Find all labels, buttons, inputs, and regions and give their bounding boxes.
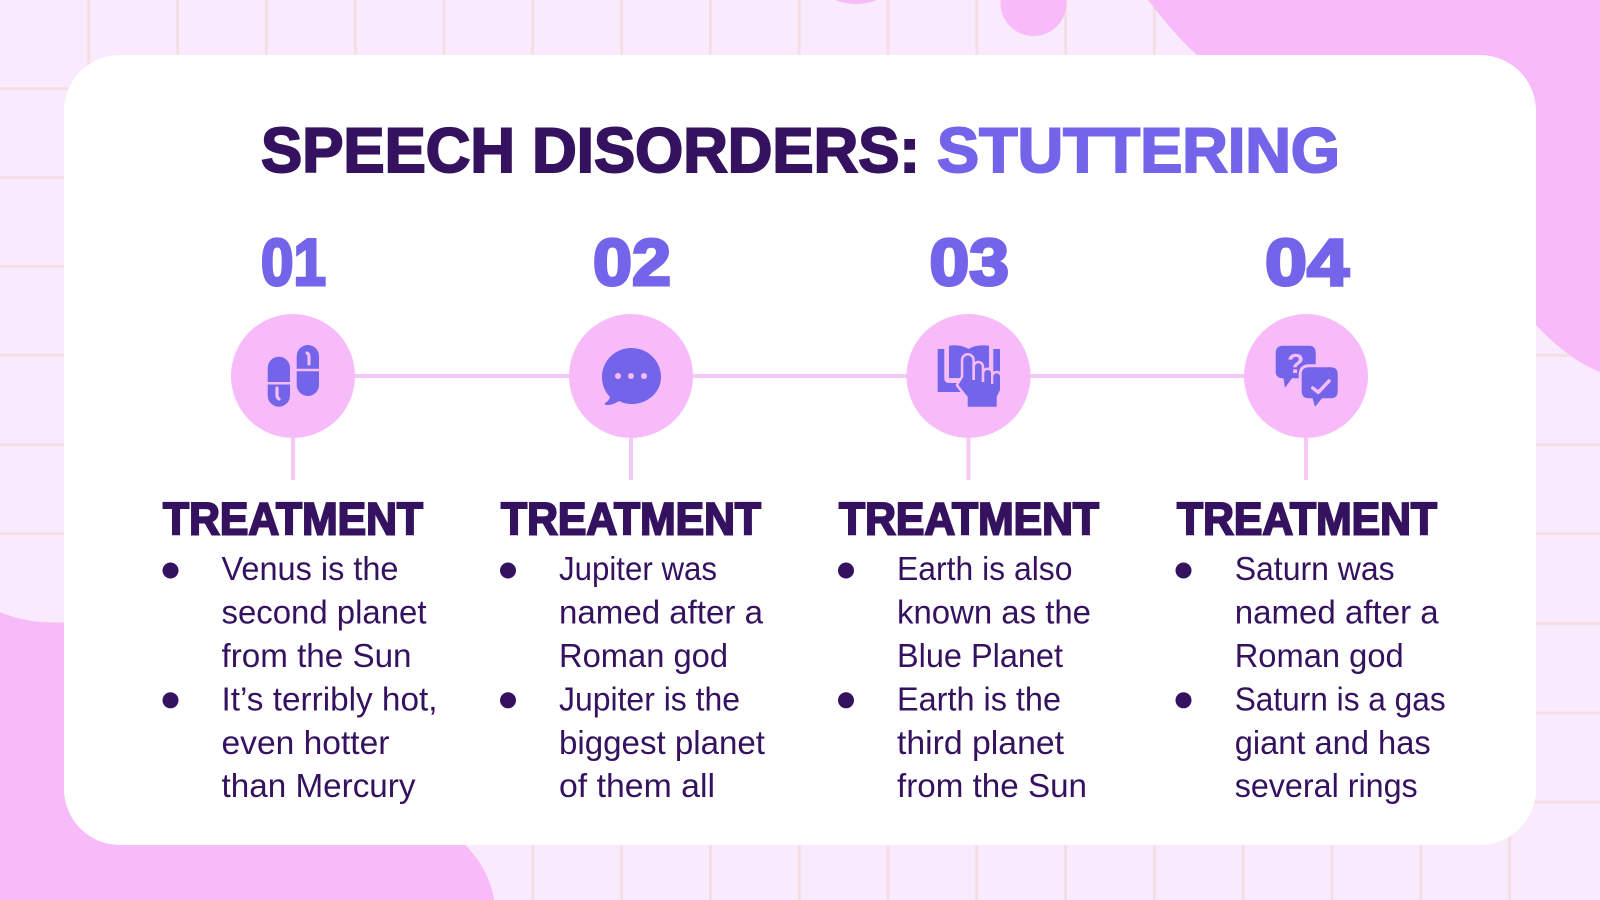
bullet list 2: Roman god	[559, 637, 728, 674]
bullet list 3: known as the	[897, 593, 1091, 630]
bullet list 2: of them all	[559, 767, 715, 804]
column 4	[1176, 225, 1446, 804]
bullet list 1	[162, 550, 438, 804]
heading: treatment 4: TREATMENT	[1177, 494, 1437, 544]
number 02: 02	[593, 225, 671, 299]
timeline connector	[291, 374, 1308, 480]
bullet list 4: Roman god	[1235, 637, 1404, 674]
bullet list 4: Saturn is a gas	[1235, 680, 1446, 717]
icon: capsules	[231, 314, 355, 438]
bullet list 2: Jupiter was	[559, 550, 717, 587]
bullet list 3: from the Sun	[897, 767, 1087, 804]
bullet list 2: biggest planet	[559, 724, 765, 761]
bullet list 2	[500, 550, 765, 804]
bullet list 4: giant and has	[1235, 724, 1431, 761]
bullet list 2: Jupiter is the	[559, 680, 740, 717]
title	[261, 116, 1340, 186]
column 1	[162, 225, 438, 804]
icon: question and answer bubbles: ?	[1287, 348, 1304, 379]
bullet list 1: It’s terribly hot,	[222, 680, 438, 717]
icon: question and answer bubbles	[1244, 314, 1368, 438]
bullet list 1: Venus is the	[222, 550, 398, 587]
column 2	[500, 225, 765, 804]
number 03: 03	[930, 225, 1009, 299]
bullet list 4: several rings	[1235, 767, 1418, 804]
bullet list 3: third planet	[897, 724, 1064, 761]
heading: treatment 3: TREATMENT	[839, 494, 1099, 544]
number 01: 01	[261, 225, 326, 299]
bullet list 1: from the Sun	[222, 637, 412, 674]
number 04: 04	[1265, 225, 1349, 299]
bullet list 3	[838, 550, 1091, 804]
bullet list 4: Saturn was	[1235, 550, 1395, 587]
column 3	[838, 225, 1099, 804]
bullet list 3: Blue Planet	[897, 637, 1063, 674]
bullet list 2: named after a	[559, 593, 764, 630]
title: SPEECH DISORDERS:	[261, 116, 920, 186]
heading: treatment 2: TREATMENT	[501, 494, 761, 544]
bullet list 4	[1176, 550, 1446, 804]
bullet list 1: second planet	[222, 593, 426, 630]
heading: treatment 1: TREATMENT	[163, 494, 423, 544]
bullet list 1: than Mercury	[222, 767, 416, 804]
bullet list 3: Earth is the	[897, 680, 1061, 717]
bullet list 3: Earth is also	[897, 550, 1072, 587]
bullet list 1: even hotter	[222, 724, 390, 761]
icon: hand reading book	[906, 314, 1030, 438]
icon: speech bubble	[569, 314, 693, 438]
bullet list 4: named after a	[1235, 593, 1439, 630]
title: STUTTERING	[937, 116, 1340, 186]
